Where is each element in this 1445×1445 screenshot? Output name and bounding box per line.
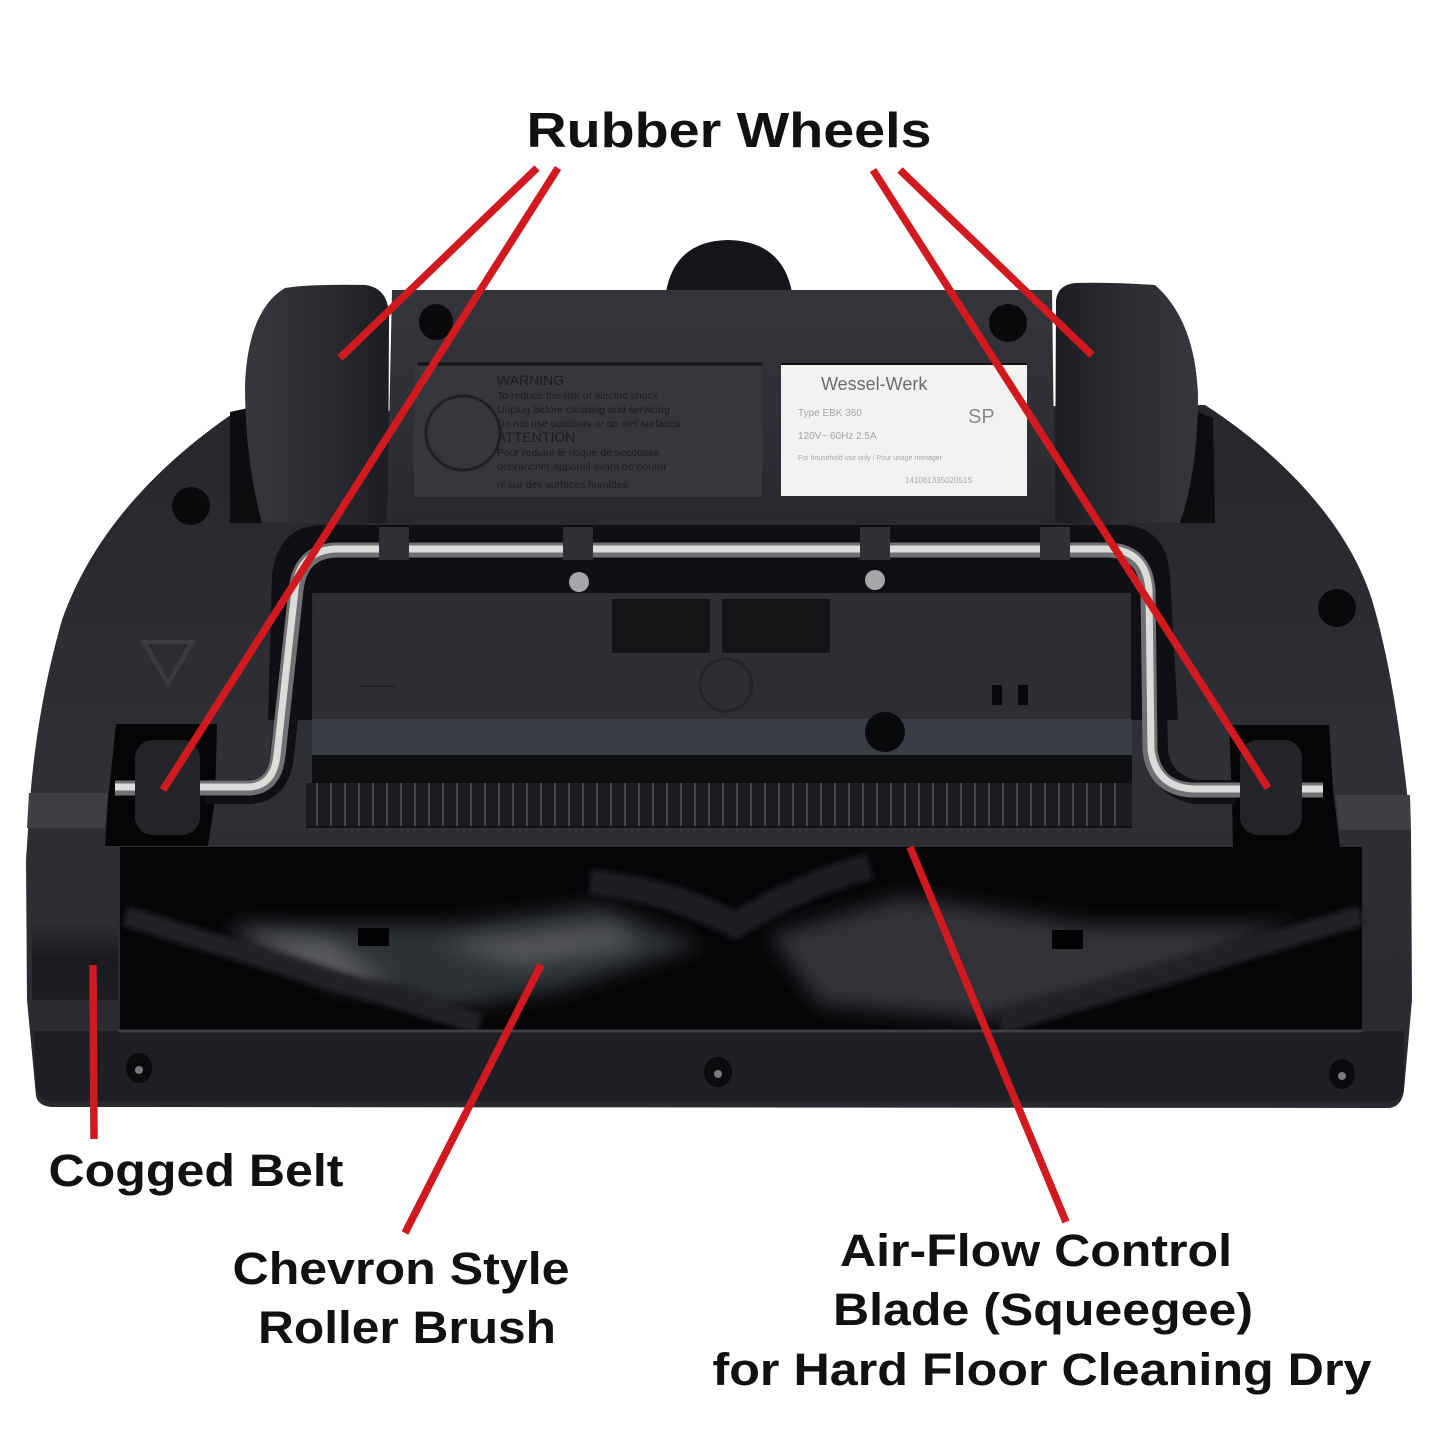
warning label panel: ATTENTION — [497, 429, 575, 445]
right roller wheel well — [1229, 725, 1340, 848]
comb strip — [306, 755, 1132, 827]
small right roller wheel — [1240, 740, 1302, 835]
illustration: vacuum power nozzle underside — [26, 240, 1412, 1108]
inner housing — [312, 593, 1131, 720]
cogged belt housing — [32, 918, 118, 1000]
rail clips and screws — [379, 527, 1070, 592]
warning label panel — [414, 364, 762, 497]
label: Chevron Style Roller Brush: Roller Brush — [258, 1302, 556, 1353]
product label: SP — [968, 406, 995, 428]
warning label panel: Pour reduire le risque de secousse — [497, 447, 659, 459]
line: cogged belt — [93, 965, 94, 1139]
label: Cogged Belt: Cogged Belt — [48, 1145, 344, 1196]
left roller wheel well — [105, 724, 217, 846]
line: rubber wheel left outer — [340, 168, 537, 358]
roller brush cavity — [120, 847, 1362, 1031]
warning label panel: Do not use outdoors or on wet surfaces — [497, 418, 680, 430]
small left roller wheel — [135, 740, 200, 835]
nozzle body — [26, 405, 1412, 1108]
heading: Rubber Wheels: Rubber Wheels — [526, 104, 932, 158]
label: Chevron Style Roller Brush: Chevron Style — [232, 1243, 570, 1294]
top plate — [387, 290, 1055, 523]
recycling triangle mark — [144, 642, 192, 684]
line: rubber wheel left inner — [163, 168, 558, 790]
line: rubber wheel right inner — [873, 170, 1268, 788]
product label — [781, 364, 1027, 496]
product label: 120V~ 60Hz 2.5A — [798, 431, 877, 442]
label: Air-Flow Control Blade: Air-Flow Control — [840, 1225, 1232, 1276]
warning label panel: WARNING — [497, 372, 564, 388]
side screw holes — [172, 487, 210, 525]
label: Air-Flow Control Blade: Blade (Squeegee) — [833, 1284, 1253, 1335]
line: air-flow blade — [910, 847, 1066, 1222]
metal wheel axle rail — [115, 549, 1323, 792]
product label: For household use only / Pour usage menager — [798, 455, 943, 462]
warning label panel: ni sur des surfaces humides — [497, 479, 628, 491]
rail recess — [268, 525, 1178, 720]
right wheel — [1055, 283, 1198, 523]
front lip — [34, 1031, 1404, 1101]
warning label panel: debrancher appareil avant de nourrir — [497, 461, 667, 473]
left wheel — [245, 285, 389, 523]
warning label panel: Unplug before cleaning and servicing — [497, 404, 670, 416]
rear motor knob — [666, 240, 792, 292]
side light bands — [27, 793, 1411, 830]
product label: Type EBK 360 — [798, 408, 862, 419]
label: Air-Flow Control Blade — [712, 1225, 1372, 1395]
label: Chevron Style Roller Brush — [232, 1243, 570, 1353]
line: rubber wheel right outer — [900, 170, 1092, 355]
warning label panel: To reduce the risk of electric shock — [497, 390, 659, 402]
red callout lines — [93, 168, 1268, 1233]
product label: Wessel-Werk — [821, 374, 928, 394]
light housing band — [312, 719, 1132, 755]
center screw hole — [865, 712, 905, 752]
chevron roller brush — [125, 866, 1362, 1024]
label: Air-Flow Control Blade: for Hard Floor Cleaning Dry — [712, 1344, 1372, 1395]
wheel well shadows — [230, 405, 1215, 523]
product label: 14108133502051S — [905, 476, 973, 485]
line: chevron brush — [405, 965, 541, 1233]
